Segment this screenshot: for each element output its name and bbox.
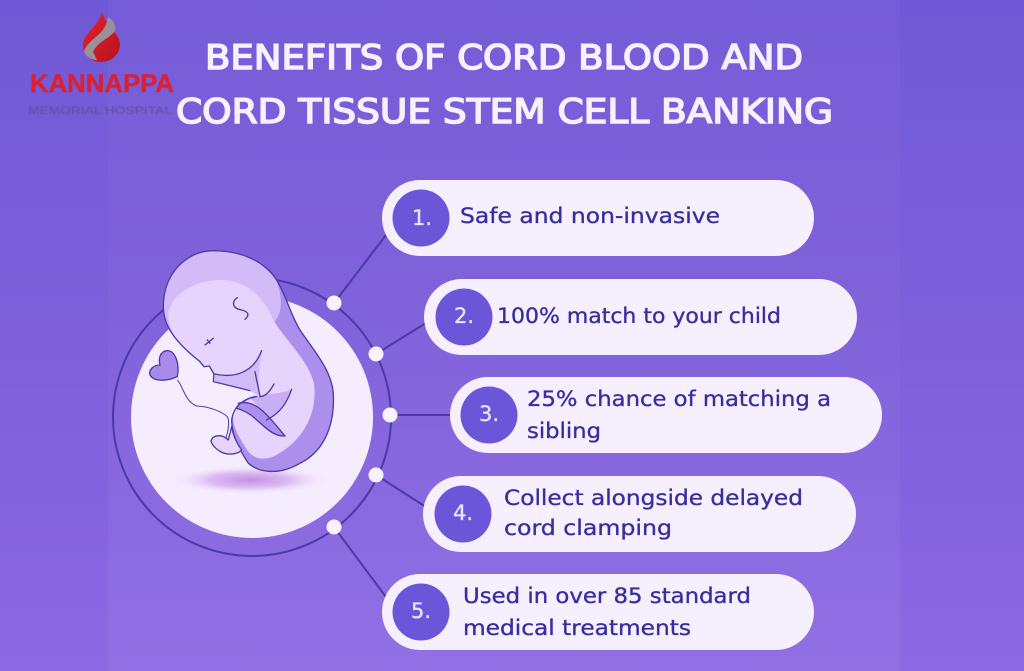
logo: Kannappa Memorial Hospital (28, 12, 174, 117)
item 2: 100% match to your child (497, 304, 781, 329)
fetus eye (205, 338, 213, 345)
illustration: fetus (150, 251, 333, 471)
fetus outline (163, 251, 333, 471)
item 5: Used in over 85 standard (463, 584, 751, 609)
item 3: sibling (527, 419, 601, 444)
fetus ear (233, 298, 248, 319)
white disc (131, 296, 373, 538)
connector lines (334, 235, 452, 597)
item 1: 1. (412, 206, 432, 230)
item 5 (382, 574, 814, 650)
umbilical cord (177, 380, 229, 438)
icon: blood drop (83, 12, 120, 62)
item 4 (423, 476, 856, 552)
fetus head highlight band (163, 251, 281, 358)
fetus neck shadow (215, 351, 262, 396)
node dots (326, 296, 398, 534)
fetus lighter inner area (168, 280, 315, 459)
item 2 (424, 279, 857, 355)
fetus knee and leg (237, 389, 292, 436)
fetus leg fold (235, 403, 285, 436)
item 2: 2. (454, 304, 474, 328)
logo subtitle: MEMORIAL HOSPITAL (28, 105, 172, 117)
fetus foot (211, 427, 242, 454)
fetus face and arm (200, 351, 274, 397)
item 1: Safe and non-invasive (460, 204, 720, 229)
item 5: medical treatments (463, 616, 691, 641)
fetus body (163, 251, 333, 471)
ground shadow (168, 465, 332, 495)
item 4: 4. (453, 501, 473, 525)
item 3: 25% chance of matching a (527, 387, 831, 412)
outer ring (113, 278, 391, 556)
heart balloon (150, 351, 178, 380)
item 3 (450, 377, 882, 453)
fetus arm fold (250, 389, 292, 421)
item 4: Collect alongside delayed (504, 486, 803, 511)
item 1 (382, 180, 814, 256)
title: CORD TISSUE STEM CELL BANKING (176, 92, 833, 132)
item 4: cord clamping (504, 516, 672, 541)
title (176, 38, 833, 132)
logo name: KANNAPPA (30, 70, 174, 98)
item 5: 5. (411, 599, 431, 623)
title: BENEFITS OF CORD BLOOD AND (205, 38, 803, 78)
item 3: 3. (479, 402, 499, 426)
